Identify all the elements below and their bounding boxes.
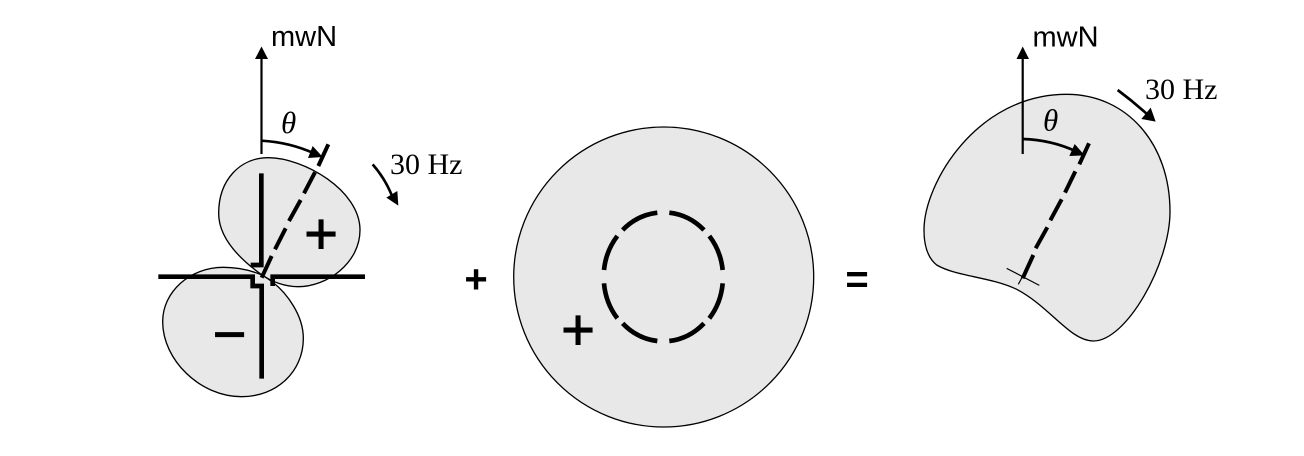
dashed heading line (1023, 143, 1089, 278)
panel: dipole pattern (158, 21, 462, 397)
combined pattern shape (924, 94, 1170, 341)
label: theta: θ (1043, 102, 1058, 138)
operator: equals: = (845, 258, 869, 302)
north axis arrow (255, 46, 268, 154)
panel: uniform circle (514, 127, 814, 427)
panel: resulting cardioid pattern (924, 22, 1217, 341)
plus sign: + (561, 298, 595, 362)
north axis arrow (1016, 46, 1029, 154)
lobe: positive (219, 158, 360, 287)
label: theta: θ (281, 105, 296, 140)
label: mwN: mwN (271, 21, 337, 53)
base tick (1007, 268, 1039, 285)
lobe: negative (163, 267, 303, 397)
minus sign: − (213, 302, 246, 367)
rotation arrow (373, 164, 398, 206)
dashed inner ellipse (604, 213, 723, 341)
rotation arrow (1118, 90, 1156, 122)
operator: plus: + (464, 258, 488, 302)
label: 30 Hz: 30 Hz (1145, 73, 1217, 106)
angle arc arrow (261, 141, 323, 158)
label: mwN: mwN (1032, 22, 1099, 54)
outer circle (514, 127, 814, 427)
label: 30 Hz: 30 Hz (390, 148, 462, 181)
dashed heading line (262, 144, 328, 278)
plus sign: + (304, 202, 338, 266)
angle arc arrow (1023, 139, 1085, 156)
axes cross (158, 173, 365, 379)
